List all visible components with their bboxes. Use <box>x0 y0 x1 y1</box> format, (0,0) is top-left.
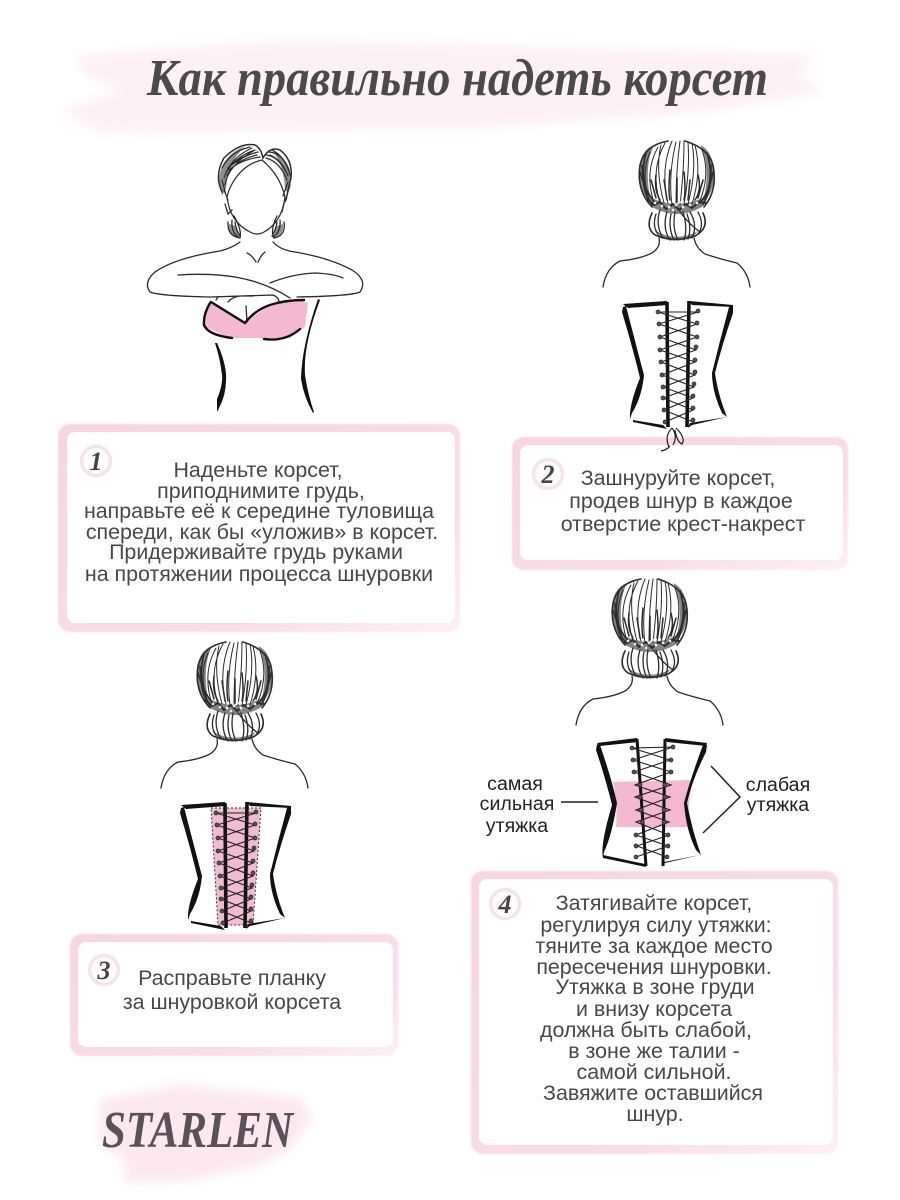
hair and face <box>147 145 363 322</box>
body lines <box>215 299 320 413</box>
badge 4: 4 <box>498 890 512 919</box>
figure 1: woman holding bust in corset <box>147 145 363 413</box>
panel 1 <box>58 424 460 632</box>
corset outline <box>204 300 304 340</box>
panel 3 text <box>123 966 341 1014</box>
panel 2 text: продев шнур в каждое <box>569 489 793 513</box>
label: strongest tension: сильная <box>480 793 554 815</box>
figure 2: back view, laced corset <box>603 141 750 429</box>
panel 4 text: и внизу корсета <box>576 997 732 1021</box>
panel 4 text: самой сильной. <box>577 1060 731 1084</box>
panel 2 text: отверстие крест-накрест <box>561 512 805 536</box>
title brush background <box>60 40 825 132</box>
panel 4 text: Утяжка в зоне груди <box>555 975 755 999</box>
label: weak tension: слабая <box>746 774 810 796</box>
leader: weak <box>703 766 740 833</box>
panel 1 text: Придерживайте грудь руками <box>109 540 403 564</box>
panel 1 text: направьте её к середине туловища <box>84 499 434 523</box>
badge 4 <box>490 890 520 919</box>
label: weak tension <box>746 774 810 816</box>
corset <box>596 738 707 867</box>
badge 3 <box>90 956 118 985</box>
panel 1 text: спереди, как бы «уложив» в корсет. <box>86 520 438 544</box>
label: strongest tension: самая <box>487 773 543 795</box>
figure 3: back view, placket straightened <box>161 642 308 930</box>
panel 2 text: Зашнуруйте корсет, <box>581 466 775 490</box>
waist tension band <box>613 780 693 827</box>
panel 1 text: Наденьте корсет, <box>173 458 343 482</box>
logo: STARLEN <box>102 1102 295 1159</box>
panel 1 text: приподнимите грудь, <box>157 479 365 503</box>
leader: strongest <box>561 801 598 803</box>
panel 1 text: на протяжении процесса шнуровки <box>85 562 433 586</box>
badge 2 <box>534 460 562 489</box>
figure 4: back view, tension zones <box>480 579 810 867</box>
panel 4 text: Завяжите оставшийся <box>543 1081 763 1105</box>
panel 2 text <box>561 466 805 536</box>
badge 1 <box>82 446 110 476</box>
panel 4 text: должна быть слабой, <box>540 1018 752 1042</box>
badge 2: 2 <box>540 460 554 489</box>
label: weak tension: утяжка <box>747 794 809 816</box>
panel 3 text: Расправьте планку <box>138 966 326 990</box>
corset lace bow <box>661 428 683 451</box>
label: strongest tension <box>480 773 554 837</box>
panel 2 <box>512 437 848 570</box>
panel 3 <box>70 934 398 1056</box>
corset cups pink <box>203 299 308 338</box>
logo brush background <box>100 1085 312 1182</box>
panel 4 text: шнур. <box>626 1102 684 1126</box>
label: strongest tension: утяжка <box>486 815 548 837</box>
panel 4 text: в зоне же талии - <box>568 1039 740 1063</box>
panel 4 text: регулируя силу утяжки: <box>540 913 772 937</box>
panel 4 text: Затягивайте корсет, <box>556 891 752 915</box>
panel 4 text <box>535 891 773 1126</box>
panel 1 text <box>84 458 438 586</box>
title: Как правильно надеть корсет <box>146 50 768 107</box>
panel 4 text: пересечения шнуровки. <box>536 955 772 979</box>
placket <box>211 808 261 925</box>
panel 3 text: за шнуровкой корсета <box>123 990 341 1014</box>
panel 4 <box>471 871 838 1154</box>
badge 1: 1 <box>90 447 102 476</box>
panel 4 text: тяните за каждое место <box>535 934 773 958</box>
badge 3: 3 <box>96 956 110 985</box>
